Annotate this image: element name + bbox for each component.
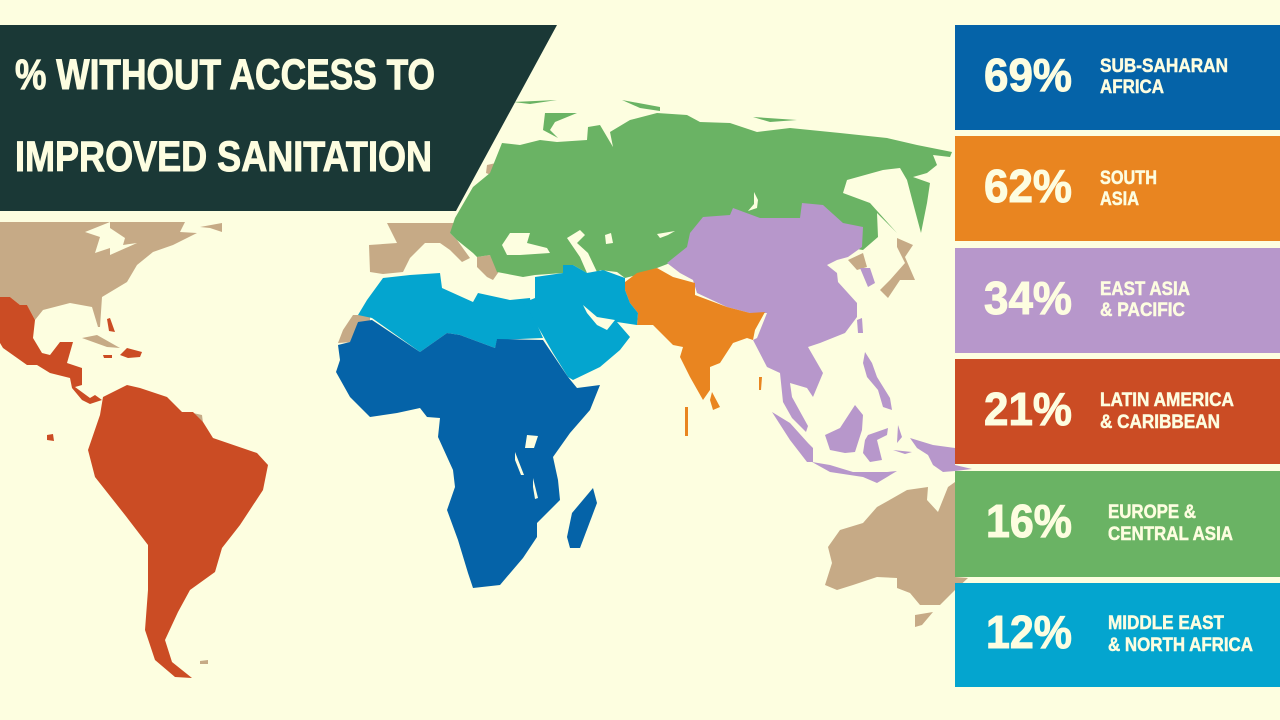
panel: middle east and north africa: MIDDLE EAST (1108, 613, 1224, 634)
panel: east asia and pacific: 34% (984, 272, 1072, 324)
region: east asia and pacific (667, 203, 972, 483)
title line 2: IMPROVED SANITATION (15, 133, 432, 181)
panel: sub-saharan africa: AFRICA (1100, 77, 1164, 98)
panel: latin america and caribbean (955, 359, 1280, 464)
panel: east asia and pacific: & PACIFIC (1100, 300, 1185, 321)
panel: middle east and north africa: & NORTH AFRICA (1108, 635, 1253, 656)
panel: south asia: ASIA (1100, 189, 1139, 210)
panel: latin america and caribbean: LATIN AMERICA (1100, 390, 1234, 411)
region: middle east and north africa (358, 265, 638, 380)
panel: south asia: 62% (984, 160, 1072, 212)
region: europe and central asia (450, 100, 952, 278)
region: high income north america, western europe, australia and japan (0, 163, 968, 664)
panel: east asia and pacific: EAST ASIA (1100, 279, 1190, 300)
panel: south asia (955, 136, 1280, 241)
panel: middle east and north africa (955, 583, 1280, 687)
panel: sub-saharan africa: SUB-SAHARAN (1100, 56, 1228, 77)
title banner (0, 25, 557, 211)
world map (0, 100, 972, 678)
title line 1: % WITHOUT ACCESS TO (15, 51, 435, 99)
region: south asia (625, 268, 765, 436)
panel: latin america and caribbean: 21% (984, 383, 1072, 435)
panel: europe and central asia: 16% (986, 495, 1072, 547)
panel: europe and central asia (955, 471, 1280, 577)
panel: europe and central asia: CENTRAL ASIA (1108, 524, 1233, 545)
panel: south asia: SOUTH (1100, 168, 1157, 189)
panel: sub-saharan africa (955, 25, 1280, 130)
region: sub-saharan africa (336, 320, 600, 588)
panel: europe and central asia: EUROPE & (1108, 502, 1196, 523)
panel: east asia and pacific (955, 248, 1280, 353)
panel: middle east and north africa: 12% (986, 606, 1072, 658)
region: latin america and caribbean (0, 297, 268, 678)
panel: sub-saharan africa: 69% (984, 49, 1072, 101)
panel: latin america and caribbean: & CARIBBEAN (1100, 412, 1220, 433)
